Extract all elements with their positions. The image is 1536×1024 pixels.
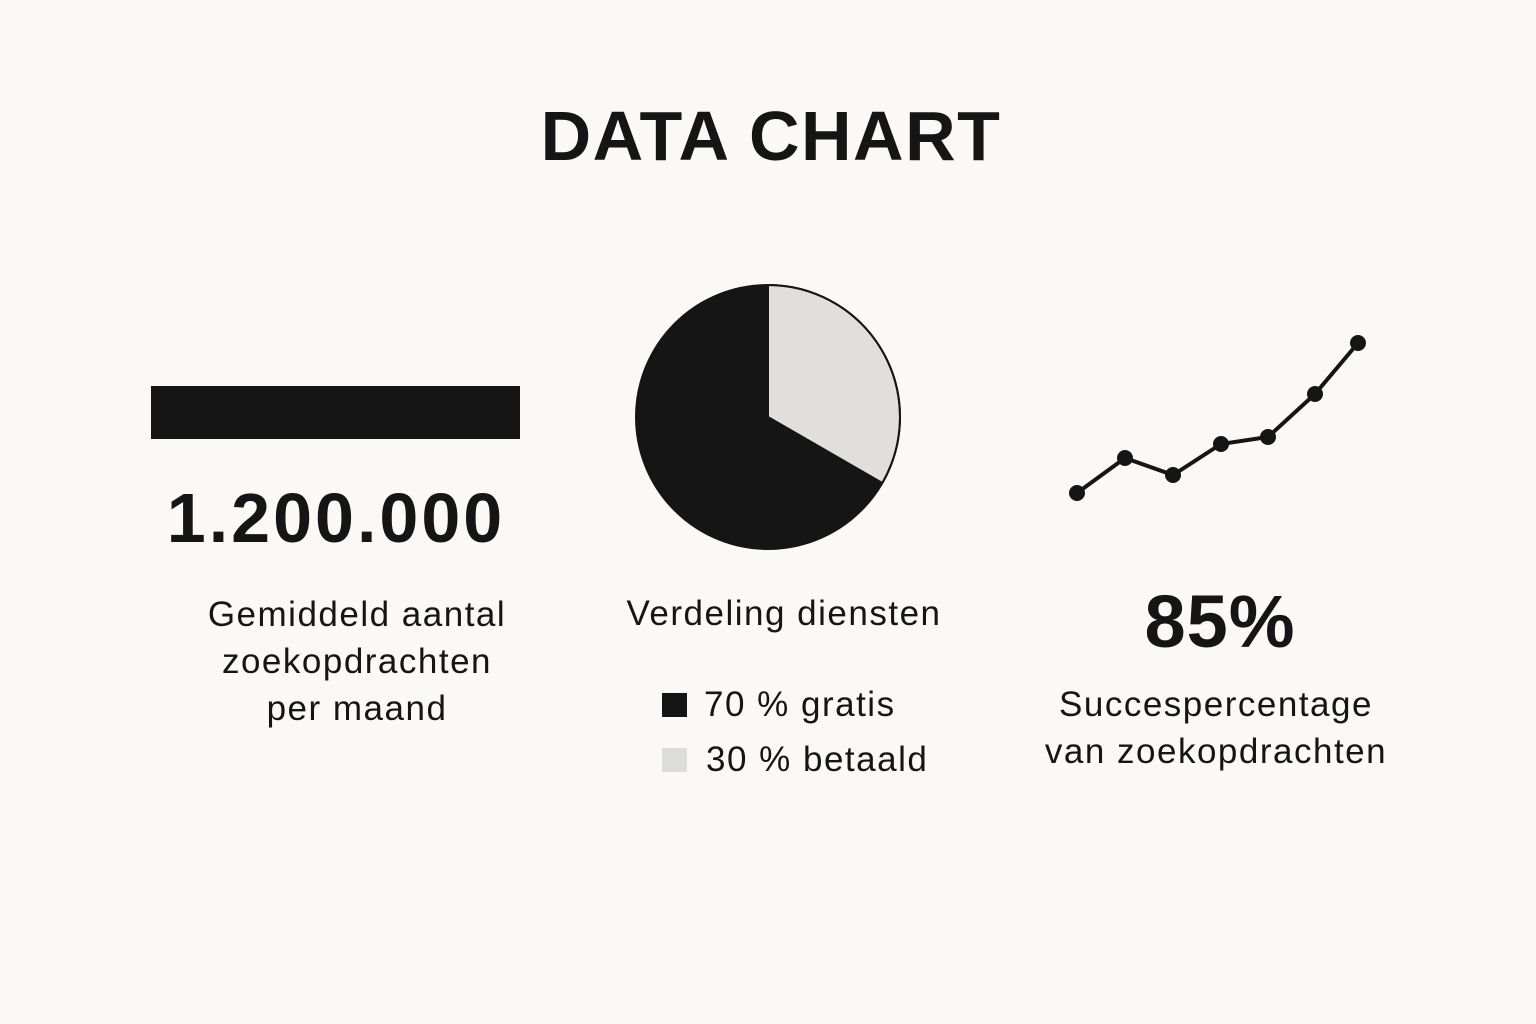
pie chart	[635, 284, 901, 550]
legend	[662, 685, 928, 779]
label: zoekopdrachten	[222, 642, 492, 681]
label	[1045, 685, 1387, 771]
number: 1.200.000	[167, 479, 505, 557]
panel: distribution	[626, 284, 942, 779]
legend: 70 % gratis	[704, 685, 896, 724]
label: van zoekopdrachten	[1045, 732, 1387, 771]
panel: searches	[151, 386, 520, 728]
bar	[151, 386, 520, 439]
label: Succespercentage	[1059, 685, 1373, 724]
label: per maand	[267, 689, 447, 728]
label: Gemiddeld aantal	[208, 595, 506, 634]
label	[208, 595, 506, 728]
label: Verdeling diensten	[626, 594, 942, 633]
legend: 30 % betaald	[706, 740, 928, 779]
panel: success rate	[1045, 335, 1387, 771]
line chart	[1069, 335, 1366, 501]
title: DATA CHART	[541, 97, 1001, 175]
number: 85%	[1144, 580, 1296, 663]
